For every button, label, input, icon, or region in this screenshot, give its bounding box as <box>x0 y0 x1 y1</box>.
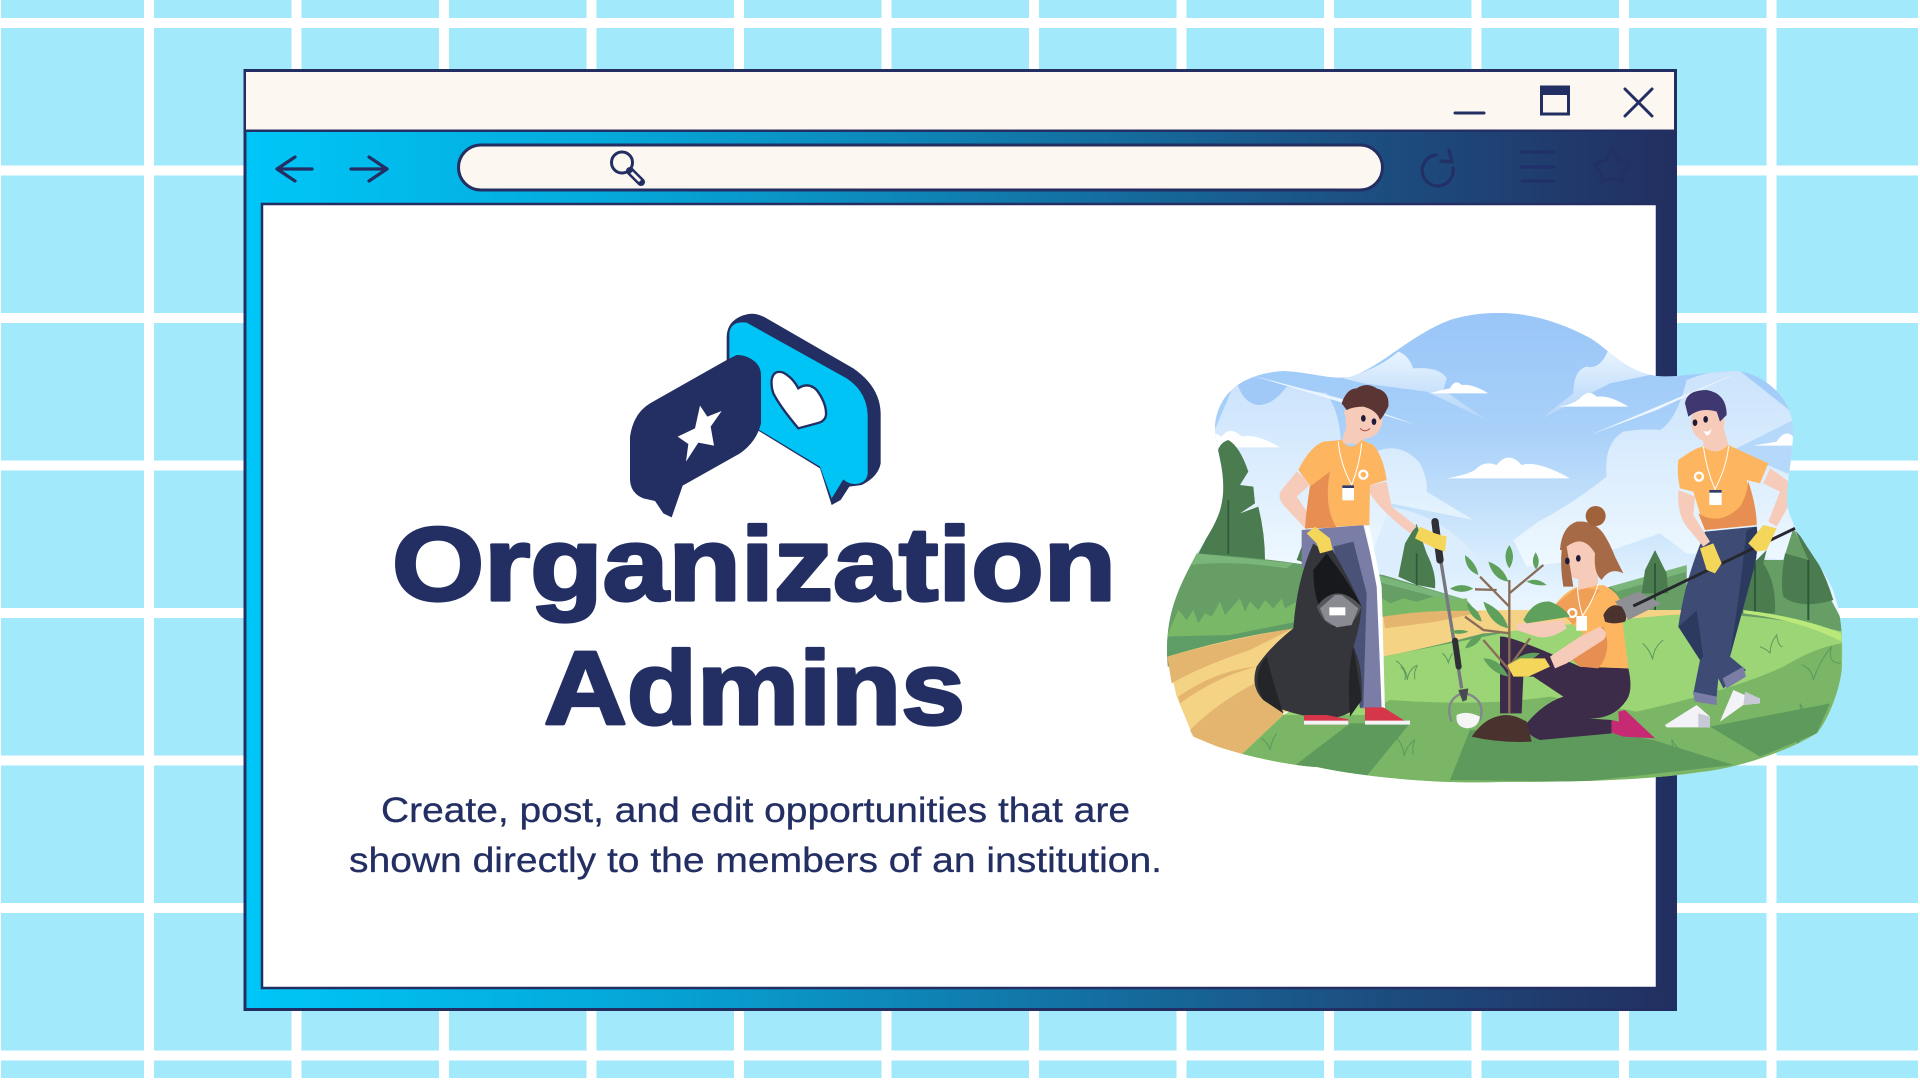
front bubble <box>630 355 761 517</box>
icon: minimize <box>1455 112 1484 114</box>
cuffs <box>1693 692 1717 705</box>
sand path <box>1167 610 1697 756</box>
gloves <box>1307 527 1333 553</box>
head <box>1561 538 1598 590</box>
icon: reload <box>1422 150 1453 186</box>
gradient frame <box>245 70 1676 1010</box>
icon: maximize <box>1541 86 1569 114</box>
person: woman planting a sapling <box>1500 506 1655 740</box>
badge <box>1577 583 1598 616</box>
back bubble <box>727 314 881 505</box>
shovel handle <box>1633 528 1795 606</box>
lanyard and badge <box>1703 446 1729 489</box>
grass band <box>1167 598 1297 637</box>
neck and head <box>1342 406 1383 444</box>
title <box>392 507 1116 747</box>
shirt <box>1678 445 1768 530</box>
leg and pants <box>1500 637 1630 740</box>
icon: star outline <box>1594 148 1630 182</box>
address bar <box>458 145 1382 190</box>
shoes <box>1665 705 1710 727</box>
title bar <box>246 72 1674 132</box>
panel: browser window <box>245 70 1676 1010</box>
person: man with trash bag <box>1254 385 1481 728</box>
shirt <box>1555 585 1628 668</box>
pants <box>1302 525 1385 708</box>
icon: forward arrow <box>351 157 387 181</box>
shoe <box>1612 710 1655 738</box>
shovel head and soil <box>1615 592 1662 620</box>
pants <box>1678 527 1758 697</box>
illustration: volunteers planting a tree in a park <box>1167 313 1842 782</box>
hills <box>1150 553 1687 667</box>
icon: menu <box>1522 152 1554 181</box>
title: Admins <box>544 631 965 747</box>
gloves <box>1700 543 1722 573</box>
shoes <box>1365 707 1410 724</box>
shirt <box>1298 440 1387 528</box>
description text: shown directly to the members of an institution. <box>349 841 1162 880</box>
icon: close <box>1625 89 1652 116</box>
icon: back arrow <box>277 157 312 181</box>
trash bag <box>1254 543 1362 718</box>
star <box>678 406 722 462</box>
distant trees <box>1197 440 1435 588</box>
arms <box>1678 490 1710 547</box>
grass tufts <box>1262 634 1841 756</box>
title: Organization <box>392 507 1116 623</box>
ground <box>1242 614 1842 782</box>
hair <box>1560 521 1623 587</box>
face <box>1361 415 1376 425</box>
hair <box>1342 385 1389 420</box>
lanyard and badge <box>1338 442 1362 485</box>
arms <box>1517 620 1567 637</box>
head <box>1691 402 1728 451</box>
picker tool <box>1435 522 1481 728</box>
content area <box>262 204 1657 988</box>
right side hill and trees <box>1642 528 1843 637</box>
icon: search <box>612 152 641 182</box>
heart <box>772 372 826 428</box>
sky <box>1188 313 1842 633</box>
icon: speech bubbles with star and heart <box>630 314 881 517</box>
arms <box>1280 472 1310 530</box>
person: man with shovel <box>1603 390 1797 727</box>
clouds <box>1213 350 1793 567</box>
description text <box>349 791 1162 880</box>
description text: Create, post, and edit opportunities that are <box>381 791 1130 830</box>
sapling <box>1450 545 1570 742</box>
